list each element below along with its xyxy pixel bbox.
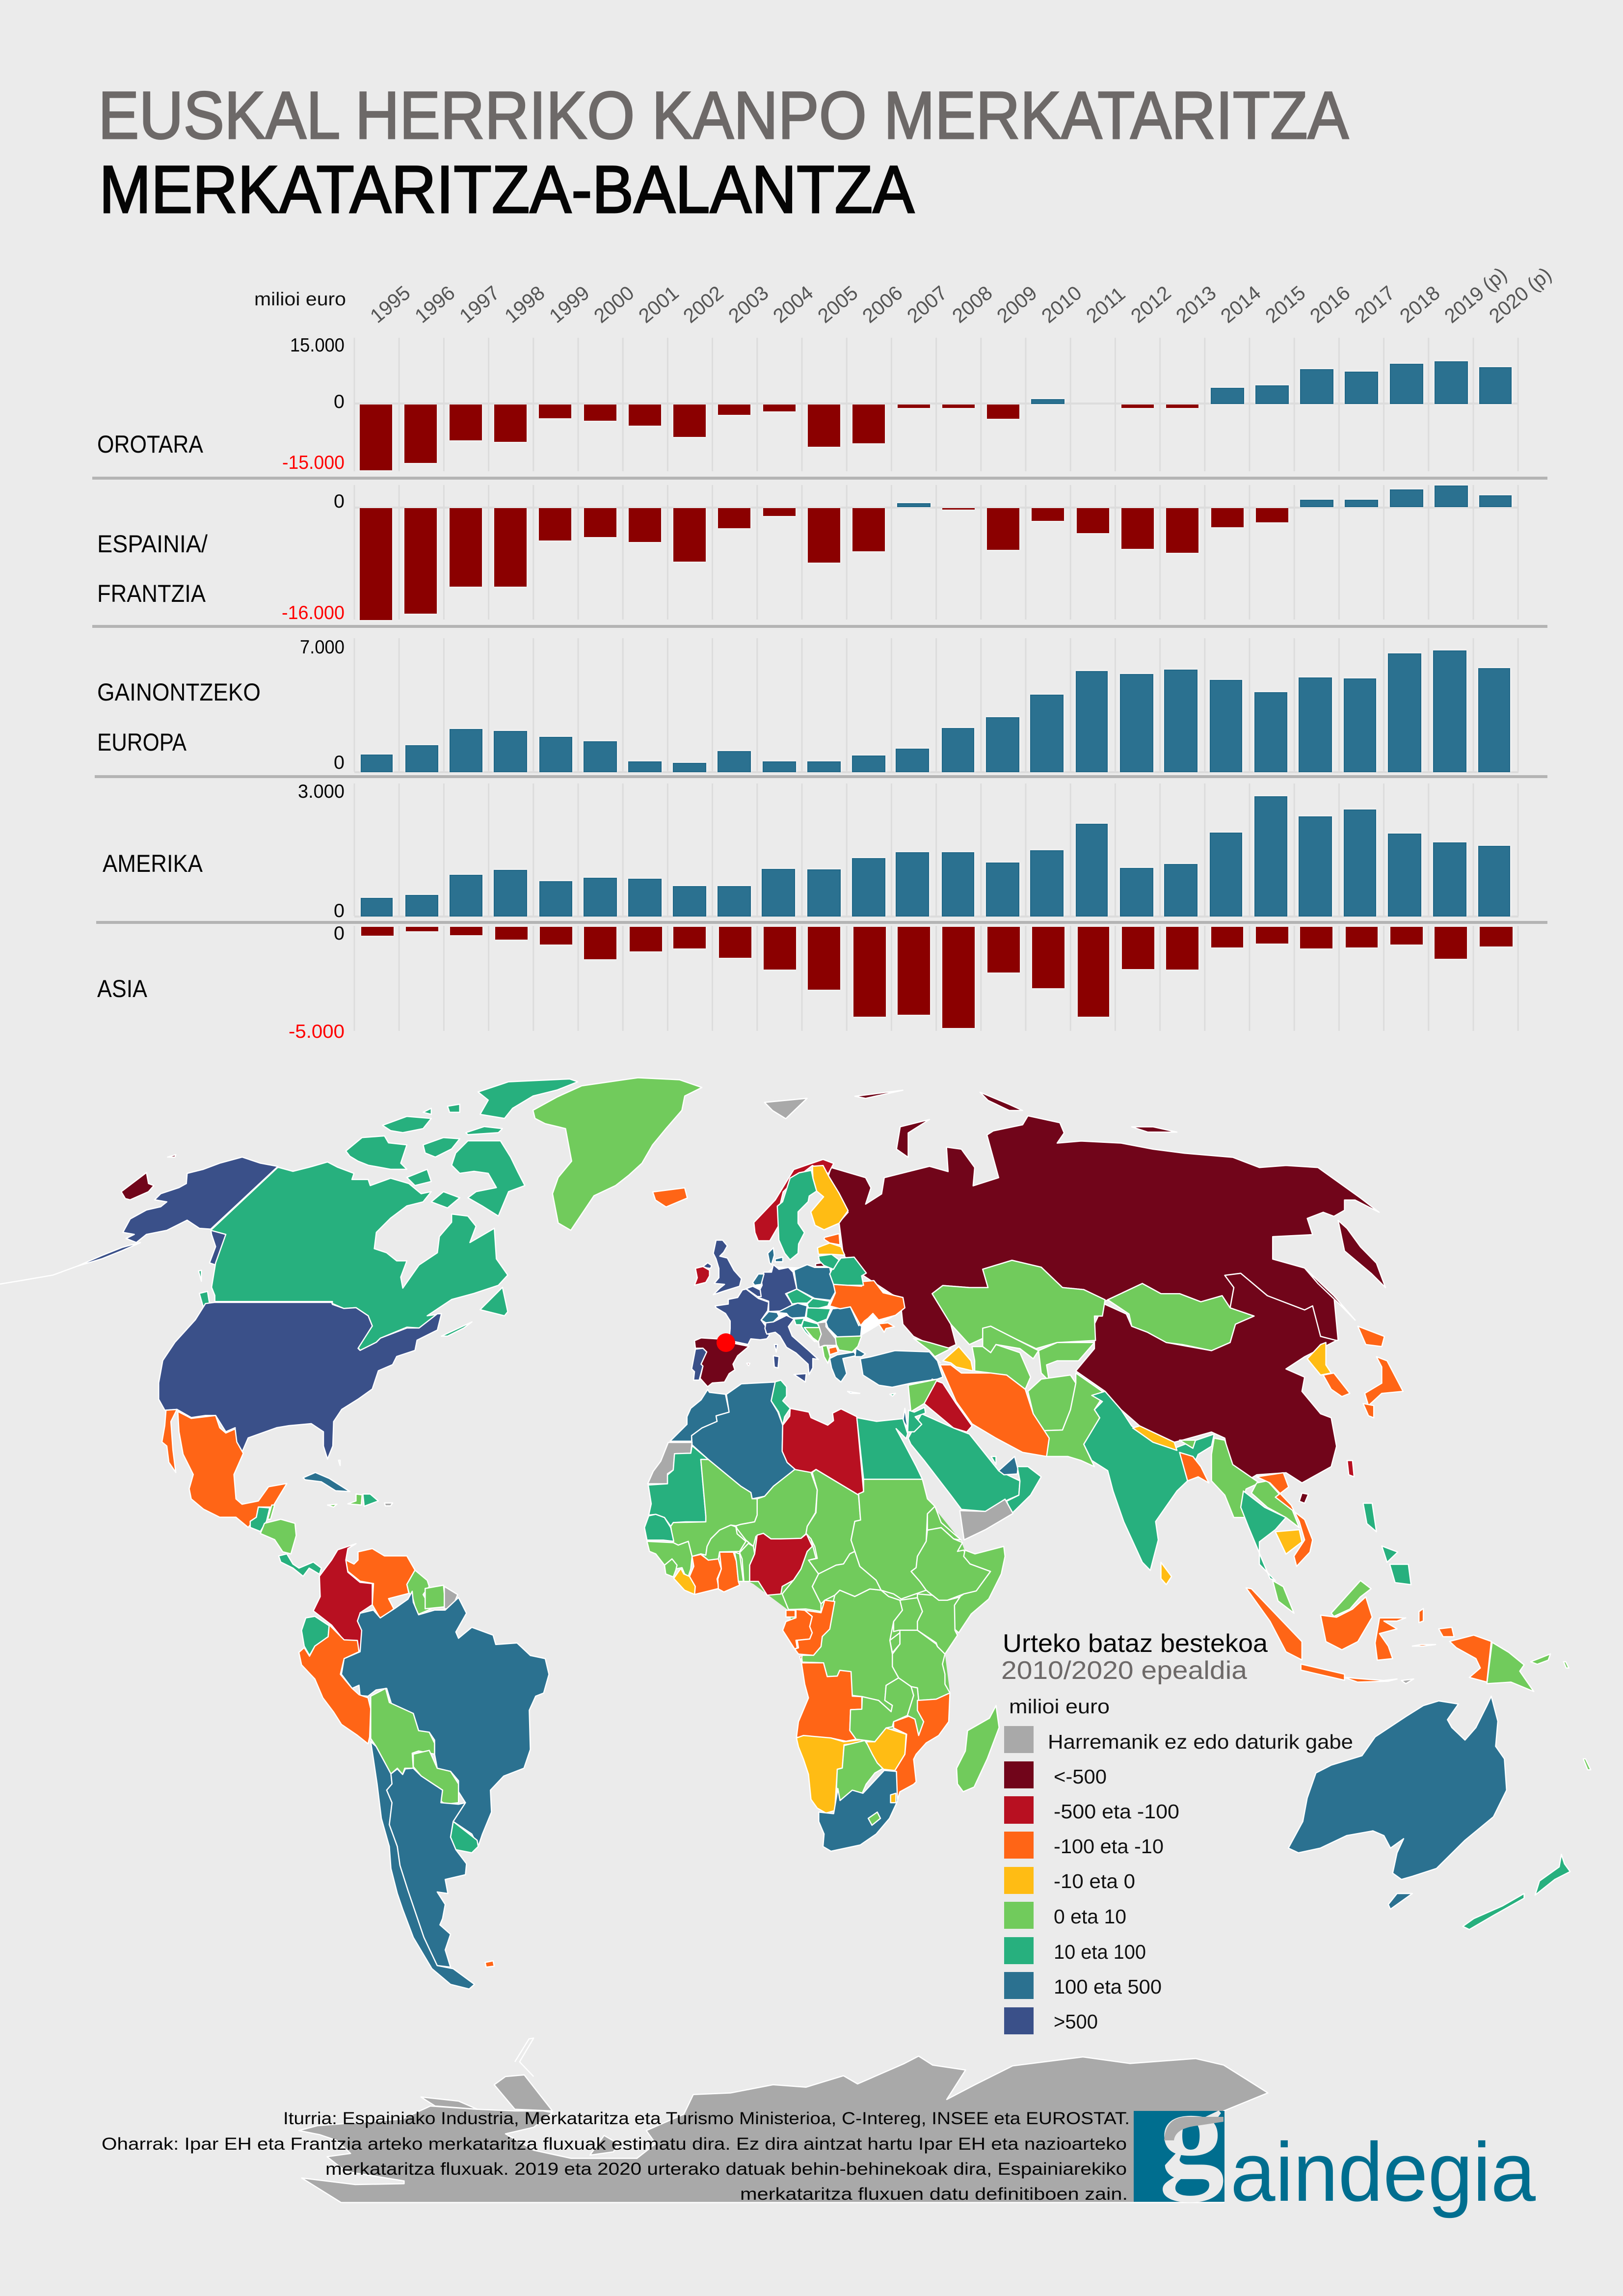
year labels: 2008: [948, 281, 997, 327]
country: Egypt: [857, 1418, 922, 1479]
chart: AMERIKA: AMERIKA: [103, 850, 203, 877]
country: Algeria: [692, 1382, 795, 1499]
country: United States: [159, 1302, 441, 1459]
map region: Europe: [670, 1234, 926, 1441]
year labels: 2004: [769, 281, 818, 327]
chart: ASIA: 0: [334, 923, 345, 944]
legend item: under -500: [1004, 1761, 1107, 1788]
chart: GAINONTZEKO EUROPA: 0: [334, 752, 345, 773]
chart: ASIA: -5.000: [289, 1021, 345, 1042]
legend item: -500 to -100: [1004, 1796, 1179, 1824]
legend item: 10 to 100: 10 eta 100: [1054, 1941, 1146, 1963]
map region: Asia: [653, 1090, 1411, 1680]
map region: Southern Africa: [819, 1770, 898, 1851]
chart: OROTARA: [97, 335, 1520, 473]
chart: ASIA: ASIA: [97, 975, 148, 1002]
axis unit label: milioi euro: [254, 289, 346, 310]
country: Spain: [694, 1338, 749, 1387]
text block: source and notes: [102, 2109, 1130, 2204]
year labels: 1996: [410, 281, 459, 327]
chart: ESPAINIA/FRANTZIA: -16.000: [282, 602, 345, 623]
logo: gaindegia: g: [1159, 2064, 1224, 2202]
chart: ESPAINIA/FRANTZIA: [97, 485, 1520, 623]
country: Ethiopia: [911, 1528, 990, 1600]
country: Namibia: [797, 1735, 865, 1813]
map region: South America: [299, 1591, 549, 1989]
country: Norway: [754, 1160, 834, 1241]
chart: ESPAINIA/FRANTZIA: FRANTZIA: [97, 580, 206, 607]
map: world choropleth: [0, 1078, 1591, 2203]
legend item: -10 to 0: [1004, 1867, 1135, 1894]
country: Japan: [1365, 1357, 1403, 1405]
chart: ESPAINIA/FRANTZIA: 0: [334, 491, 345, 512]
chart: AMERIKA: [103, 781, 1520, 921]
year labels: 2009: [992, 281, 1041, 327]
country: Mongolia: [1108, 1283, 1254, 1351]
year labels: 2018: [1395, 281, 1444, 327]
year labels: 1998: [500, 281, 549, 327]
country: Australia: [1288, 1696, 1507, 1879]
year labels: 2002: [679, 281, 728, 327]
map region: Africa: [644, 1382, 1005, 1813]
map region: Antarctica: [299, 2038, 1268, 2203]
year labels: 2015: [1261, 281, 1310, 327]
year labels: 2005: [813, 281, 862, 327]
country: Italy: [765, 1315, 819, 1375]
country: China: [1076, 1273, 1336, 1483]
legend unit: milioi euro: [1009, 1695, 1110, 1718]
legend item: 100 to 500: [1004, 1972, 1162, 1999]
country: DR Congo: [801, 1589, 903, 1712]
year labels: 2010: [1037, 281, 1086, 327]
country: Sweden: [777, 1170, 817, 1260]
chart: GAINONTZEKO EUROPA: GAINONTZEKO: [97, 678, 261, 706]
year labels: 2019 (p): [1440, 263, 1511, 327]
year labels: 2014: [1216, 281, 1265, 327]
map region: Oceania and Madagascar: [957, 1609, 1591, 1930]
country: Venezuela: [346, 1548, 415, 1619]
country: Angola: [797, 1663, 862, 1741]
country: Russia: [828, 1116, 1379, 1351]
country: Ukraine: [830, 1281, 905, 1325]
country: Colombia: [313, 1544, 372, 1651]
country: South Africa: [819, 1770, 898, 1851]
country: Germany: [758, 1265, 797, 1312]
year labels: 2020 (p): [1485, 263, 1556, 327]
year labels: 2000: [589, 281, 639, 327]
panel: map legend: [1001, 1629, 1353, 2034]
country: Mozambique: [894, 1693, 950, 1801]
legend item: -10 to 0: -10 eta 0: [1054, 1870, 1135, 1892]
year labels: 2007: [903, 281, 952, 327]
title: subheading: MERKATARITZA-BALANTZA: [99, 152, 915, 227]
country: Saudi Arabia: [908, 1414, 1020, 1512]
text block: source and notes: merkataritza fluxuak. 2019 eta 2020 urterako datuak behin-behinekoak dira, Espainiarekiko: [325, 2160, 1127, 2179]
title: main heading: EUSKAL HERRIKO KANPO MERKATARITZA: [98, 78, 1349, 153]
country: Libya: [782, 1408, 864, 1495]
chart: AMERIKA: 3.000: [298, 781, 345, 802]
legend subtitle: 2010/2020 epealdia: [1001, 1656, 1247, 1685]
legend title: Urteko bataz bestekoa: [1003, 1629, 1268, 1658]
legend item: -100 to -10: [1004, 1832, 1164, 1859]
chart: GAINONTZEKO EUROPA: [97, 637, 1520, 773]
year labels: 2013: [1171, 281, 1221, 327]
chart: GAINONTZEKO EUROPA: EUROPA: [97, 729, 187, 756]
legend item: under -500: <-500: [1054, 1765, 1107, 1788]
country: Niger: [736, 1469, 817, 1546]
year labels: 2017: [1350, 281, 1399, 327]
chart: OROTARA: OROTARA: [97, 431, 204, 458]
country: Mali: [671, 1459, 757, 1556]
text block: source and notes: Oharrak: Ipar EH eta Frantzia arteko merkataritza fluxuak estimatu dira. Ez dira aintzat hartu Ipar EH eta nazioarteko: [102, 2134, 1127, 2154]
year labels: [366, 263, 1556, 327]
year labels: 2003: [724, 281, 773, 327]
country: Kazakhstan: [932, 1260, 1105, 1349]
country: Mexico: [178, 1411, 287, 1527]
logo: gaindegia: aindegia: [1230, 2126, 1536, 2219]
country: Greenland: [533, 1078, 702, 1230]
legend item: no data: Harremanik ez edo daturik gabe: [1048, 1730, 1353, 1753]
year labels: 2006: [858, 281, 907, 327]
country: Nigeria: [749, 1533, 812, 1595]
legend item: -100 to -10: -100 eta -10: [1054, 1835, 1164, 1858]
chart: OROTARA: -15.000: [282, 452, 345, 473]
map region: North America: [0, 1078, 702, 1651]
country: India: [1084, 1391, 1214, 1570]
logo: gaindegia: [1134, 2064, 1536, 2219]
chart: GAINONTZEKO EUROPA: 7.000: [300, 637, 345, 658]
chart: OROTARA: 0: [334, 391, 345, 412]
country: Iran: [940, 1365, 1049, 1457]
country: Chad: [806, 1469, 860, 1574]
chart: ESPAINIA/FRANTZIA: ESPAINIA/: [97, 530, 208, 558]
year labels: 1995: [366, 281, 415, 327]
country: Brazil: [342, 1591, 549, 1846]
legend item: over 500: [1004, 2007, 1098, 2034]
text block: source and notes: merkataritza fluxuen datu definitiboen zain.: [740, 2185, 1128, 2204]
legend item: no data: [1004, 1726, 1353, 1753]
year labels: 2012: [1126, 281, 1175, 327]
country: France: [715, 1289, 770, 1345]
legend item: 0 to 10: [1004, 1902, 1126, 1929]
country: Sudan: [851, 1479, 935, 1599]
legend item: over 500: >500: [1054, 2010, 1098, 2033]
year labels: 1997: [455, 281, 504, 327]
year labels: 2011: [1082, 282, 1129, 327]
year labels: 2001: [634, 281, 683, 327]
year labels: 1999: [545, 281, 594, 327]
text block: source and notes: Iturria: Espainiako Industria, Merkataritza eta Turismo Ministerioa, C-Intereg, INSEE eta EUROSTAT.: [283, 2109, 1130, 2128]
country: Morocco: [670, 1390, 729, 1441]
chart: AMERIKA: 0: [334, 900, 345, 921]
chart: OROTARA: 15.000: [290, 335, 345, 356]
panel: bar charts: [92, 263, 1556, 1042]
chart: ASIA: [97, 923, 1522, 1042]
legend item: -500 to -100: -500 eta -100: [1054, 1800, 1179, 1823]
country: Turkey: [860, 1351, 943, 1387]
country: Finland: [811, 1165, 848, 1230]
marker: Euskal Herria red dot: [717, 1333, 735, 1352]
year labels: 2016: [1305, 281, 1355, 327]
legend item: 10 to 100: [1004, 1937, 1146, 1964]
legend item: 100 to 500: 100 eta 500: [1054, 1975, 1162, 1998]
legend item: 0 to 10: 0 eta 10: [1054, 1905, 1126, 1928]
